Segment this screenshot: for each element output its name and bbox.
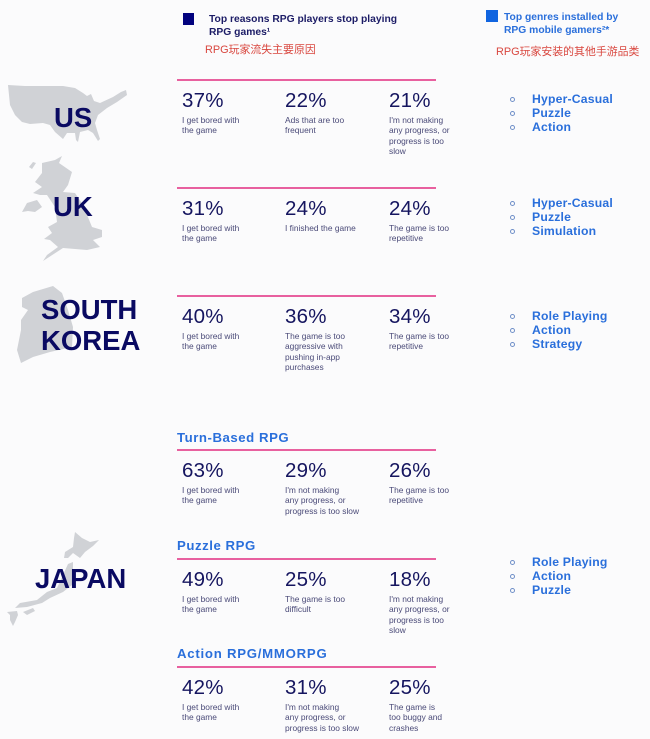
stat: 36%: aggressive with [285, 341, 343, 351]
stat: 36%: The game is too [285, 331, 345, 341]
legend text: top reasons [209, 14, 397, 38]
stat: 22%: frequent [285, 125, 316, 135]
legend text: top genres [504, 12, 618, 36]
stat: 34%: repetitive [389, 341, 423, 351]
stat: 49%: the game [182, 604, 217, 614]
list: Japan genres: Role Playing [532, 555, 608, 569]
stat: 63%: the game [182, 495, 217, 505]
stat: 25%: too buggy and [389, 712, 442, 722]
map: South Korea [17, 286, 73, 363]
legend text: top reasons: RPG games¹ [209, 27, 270, 38]
stat: 26%: The game is too [389, 485, 449, 495]
legend text: top genres: Top genres installed by [504, 12, 618, 23]
stat: 42%: the game [182, 712, 217, 722]
list: UK genres [510, 196, 613, 238]
stat: 25% [389, 676, 442, 733]
label: Japan: JAPAN [35, 563, 126, 594]
list: Japan genres: Puzzle [532, 583, 571, 597]
panel: UK reasons [177, 187, 449, 243]
stat: 36%: pushing in-app [285, 352, 340, 362]
stat: 31%: I get bored with [182, 223, 239, 233]
Chinese caption: other genres: RPG玩家安装的其他手游品类 [496, 46, 639, 58]
stat: 31%: I'm not making [285, 702, 339, 712]
stat: 24% repetitive [389, 197, 449, 243]
stat: 18%: 18% [389, 568, 431, 591]
stat: 21%: I'm not making [389, 115, 443, 125]
stat: 18%: slow [389, 625, 406, 635]
stat: 21%: any progress, or [389, 125, 450, 135]
stat: 18%: I'm not making [389, 594, 443, 604]
list: US genres: Hyper-Casual [532, 92, 613, 106]
list: UK genres: Simulation [532, 224, 596, 238]
stat: 31%: the game [182, 233, 217, 243]
stat: 31%: progress is too slow [285, 723, 359, 733]
label: South Korea [41, 294, 140, 356]
stat: 18% [389, 568, 450, 635]
stat: 29%: any progress, or [285, 495, 346, 505]
stat: 37%: 37% [182, 89, 224, 112]
list: South Korea genres: Role Playing [532, 309, 608, 323]
stat: 22%: Ads that are too [285, 115, 344, 125]
stat: 22%: 22% [285, 89, 327, 112]
stat: 25%: 25% [285, 568, 327, 591]
stat: 25%: 25% [389, 676, 431, 699]
stat: 31%: any progress, or [285, 712, 346, 722]
list: Japan genres [510, 555, 608, 597]
stat: 40%: 40% [182, 305, 224, 328]
Chinese caption: churn reasons: RPG玩家流失主要原因 [205, 44, 316, 56]
stat: 42%: 42% [182, 676, 224, 699]
legend: top reasons [183, 13, 397, 38]
panel: South Korea reasons [177, 295, 449, 372]
list: South Korea genres: Strategy [532, 337, 582, 351]
panel: Action RPG/MMORPG reasons [177, 666, 442, 733]
map: Japan [7, 532, 99, 626]
panel: Turn-Based RPG reasons [177, 449, 449, 516]
list: UK genres: Puzzle [532, 210, 571, 224]
stat: 25% [285, 568, 345, 614]
stat: 37%: the game [182, 125, 217, 135]
label: South Korea: KOREA [41, 324, 140, 356]
stat: 29%: I'm not making [285, 485, 339, 495]
stat: 40%: the game [182, 341, 217, 351]
stat: 34%: The game is too [389, 331, 449, 341]
list: South Korea genres: Action [532, 323, 571, 337]
stat: 31% [182, 197, 239, 243]
stat: 24% repetitive: repetitive [389, 233, 423, 243]
stat: 31%: 31% [285, 676, 327, 699]
stat: 25%: The game is too [285, 594, 345, 604]
panel: Puzzle RPG reasons [177, 558, 450, 635]
stat: 49% [182, 568, 239, 614]
legend text: top reasons: Top reasons RPG players stop playing [209, 14, 397, 25]
stat: 22% [285, 89, 344, 135]
stat: 31%: 31% [182, 197, 224, 220]
stat: 26%: repetitive [389, 495, 423, 505]
stat: 37% [182, 89, 239, 135]
stat: 25%: crashes [389, 723, 418, 733]
heading: Action RPG/MMORPG: Action RPG/MMORPG [177, 646, 328, 661]
stat: 24% finished: I finished the game [285, 223, 356, 233]
heading: Turn-Based RPG: Turn-Based RPG [177, 430, 289, 445]
stat: 26%: 26% [389, 459, 431, 482]
stat: 36%: purchases [285, 362, 324, 372]
stat: 29%: 29% [285, 459, 327, 482]
legend: top genres [486, 10, 618, 36]
stat: 63%: I get bored with [182, 485, 239, 495]
stat: 21%: 21% [389, 89, 431, 112]
stat: 34% [389, 305, 449, 351]
stat: 31% [285, 676, 360, 733]
list: South Korea genres [510, 309, 608, 351]
legend swatch: navy [183, 13, 194, 25]
stat: 26% [389, 459, 449, 505]
stat: 36% [285, 305, 345, 372]
stat: 18%: any progress, or [389, 604, 450, 614]
stat: 24% repetitive: 24% [389, 197, 431, 220]
list: US genres: Action [532, 120, 571, 134]
map: United Kingdom [22, 156, 102, 261]
stat: 21%: slow [389, 146, 406, 156]
label: US: US [54, 102, 92, 133]
stat: 37%: I get bored with [182, 115, 239, 125]
stat: 25%: difficult [285, 604, 311, 614]
label: South Korea: SOUTH [41, 294, 137, 325]
stat: 40% [182, 305, 239, 351]
stat: 18%: progress is too [389, 615, 444, 625]
stat: 36%: 36% [285, 305, 327, 328]
map: United States [8, 85, 127, 142]
list: Japan genres: Action [532, 569, 571, 583]
legend swatch: blue [486, 10, 498, 22]
legend text: top genres: RPG mobile gamers²* [504, 25, 609, 36]
stat: 29% [285, 459, 360, 516]
stat: 21%: progress is too [389, 136, 444, 146]
stat: 24% finished [285, 197, 356, 233]
stat: 21% [389, 89, 450, 156]
stat: 49%: I get bored with [182, 594, 239, 604]
stat: 49%: 49% [182, 568, 224, 591]
heading: Puzzle RPG: Puzzle RPG [177, 538, 256, 553]
stat: 63%: 63% [182, 459, 224, 482]
list: US genres: Puzzle [532, 106, 571, 120]
stat: 25%: The game is [389, 702, 435, 712]
panel: US reasons [177, 79, 450, 156]
stat: 42%: I get bored with [182, 702, 239, 712]
stat: 34%: 34% [389, 305, 431, 328]
list: UK genres: Hyper-Casual [532, 196, 613, 210]
stat: 24% repetitive: The game is too [389, 223, 449, 233]
stat: 24% finished: 24% [285, 197, 327, 220]
stat: 29%: progress is too slow [285, 506, 359, 516]
label: UK: UK [53, 191, 93, 222]
stat: 40%: I get bored with [182, 331, 239, 341]
list: US genres [510, 92, 613, 134]
stat: 42% [182, 676, 239, 722]
stat: 63% [182, 459, 239, 505]
